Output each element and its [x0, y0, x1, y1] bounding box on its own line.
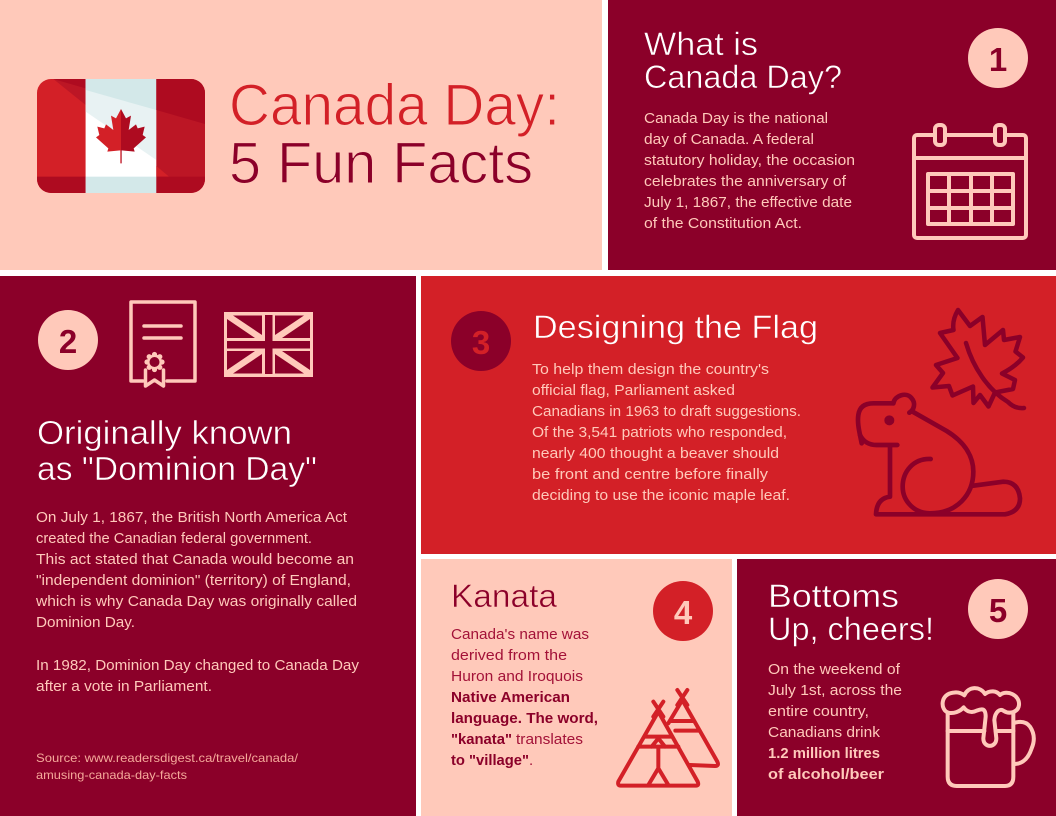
number badge 2: [38, 310, 98, 370]
number badge 5: 5: [989, 592, 1007, 629]
heading: [37, 414, 317, 487]
source: Source: www.readersdigest.ca/travel/canada/: [36, 751, 299, 765]
body text: day of Canada. A federal: [644, 131, 814, 148]
body text: This act stated that Canada would become an: [36, 551, 354, 568]
heading: [768, 578, 934, 647]
body text: .: [529, 752, 533, 769]
panel: designing the flag: [421, 276, 1056, 554]
panel: bottoms up: [737, 559, 1056, 816]
icon: British flag: [224, 312, 313, 377]
body text: [451, 626, 598, 769]
body text: nearly 400 thought a beaver should: [532, 445, 779, 462]
body text: Canadians drink: [768, 724, 881, 741]
number badge 4: 4: [674, 594, 693, 631]
body text: after a vote in Parliament.: [36, 678, 212, 695]
panel: Kanata: [421, 559, 732, 816]
body text: To help them design the country's: [532, 361, 769, 378]
source: [36, 751, 299, 782]
number badge 2: 2: [59, 323, 77, 360]
number badge 3: [451, 311, 511, 371]
number badge 1: [968, 28, 1028, 88]
panel: title: [0, 0, 602, 270]
body text: 1.2 million litres: [768, 745, 880, 762]
heading: Canada Day?: [644, 59, 842, 95]
body text: be front and centre before finally: [532, 466, 769, 483]
body text: [768, 661, 902, 783]
number badge 5: [968, 579, 1028, 639]
body text: created the Canadian federal government.: [36, 530, 312, 547]
body text: On July 1, 1867, the British North America Act: [36, 509, 348, 526]
icon: certificate: [131, 302, 195, 386]
heading: Bottoms: [768, 578, 899, 614]
number badge 4: [653, 581, 713, 641]
panel: what is Canada Day: [608, 0, 1056, 270]
body text: Of the 3,541 patriots who responded,: [532, 424, 787, 441]
heading: as "Dominion Day": [37, 450, 317, 487]
body text: derived from the: [451, 647, 567, 664]
heading: Originally known: [37, 414, 292, 451]
body text: July 1, 1867, the effective date: [644, 194, 852, 211]
body text: celebrates the anniversary of: [644, 173, 847, 190]
title: Canada Day:: [229, 73, 560, 138]
body text: [644, 110, 855, 232]
heading: Kanata: [451, 578, 557, 614]
icon: beer mug: [943, 688, 1034, 786]
body text: July 1st, across the: [768, 682, 902, 699]
body text: which is why Canada Day was originally called: [35, 593, 357, 610]
body text: Canadians in 1963 to draft suggestions.: [532, 403, 801, 420]
icon: beaver: [858, 395, 1020, 514]
number badge 3: 3: [472, 324, 490, 361]
body text: In 1982, Dominion Day changed to Canada Day: [36, 657, 359, 674]
body text: language. The word,: [451, 710, 598, 727]
icon: maple leaf: [932, 310, 1024, 408]
body text: translates: [516, 731, 583, 748]
body text: deciding to use the iconic maple leaf.: [532, 487, 790, 504]
body text: entire country,: [768, 703, 869, 720]
body text: Canada Day is the national: [644, 110, 828, 127]
body text: of alcohol/beer: [768, 766, 884, 783]
icon: calendar: [914, 125, 1026, 238]
body text: Native American: [451, 689, 570, 706]
body text: Dominion Day.: [36, 614, 135, 631]
icon: teepees: [618, 690, 718, 786]
heading: Up, cheers!: [768, 611, 934, 647]
body text: of the Constitution Act.: [644, 215, 802, 232]
heading: Designing the Flag: [533, 309, 818, 345]
body text: Canada's name was: [451, 626, 589, 643]
body text: [35, 509, 359, 695]
body text: On the weekend of: [768, 661, 901, 678]
body text: Huron and Iroquois: [451, 668, 583, 685]
body text: statutory holiday, the occasion: [644, 152, 855, 169]
title: 5 Fun Facts: [229, 131, 533, 196]
heading: [644, 26, 842, 95]
panel: Dominion Day: [0, 276, 416, 816]
title: [229, 73, 560, 196]
source: amusing-canada-day-facts: [36, 768, 187, 782]
heading: What is: [644, 26, 758, 62]
number badge 1: 1: [989, 41, 1007, 78]
body text: "independent dominion" (territory) of England,: [36, 572, 351, 589]
body text: to "village": [451, 752, 529, 769]
body text: [532, 361, 801, 504]
body text: "kanata": [451, 731, 512, 748]
icon: Canadian flag: [37, 79, 205, 193]
body text: official flag, Parliament asked: [532, 382, 735, 399]
